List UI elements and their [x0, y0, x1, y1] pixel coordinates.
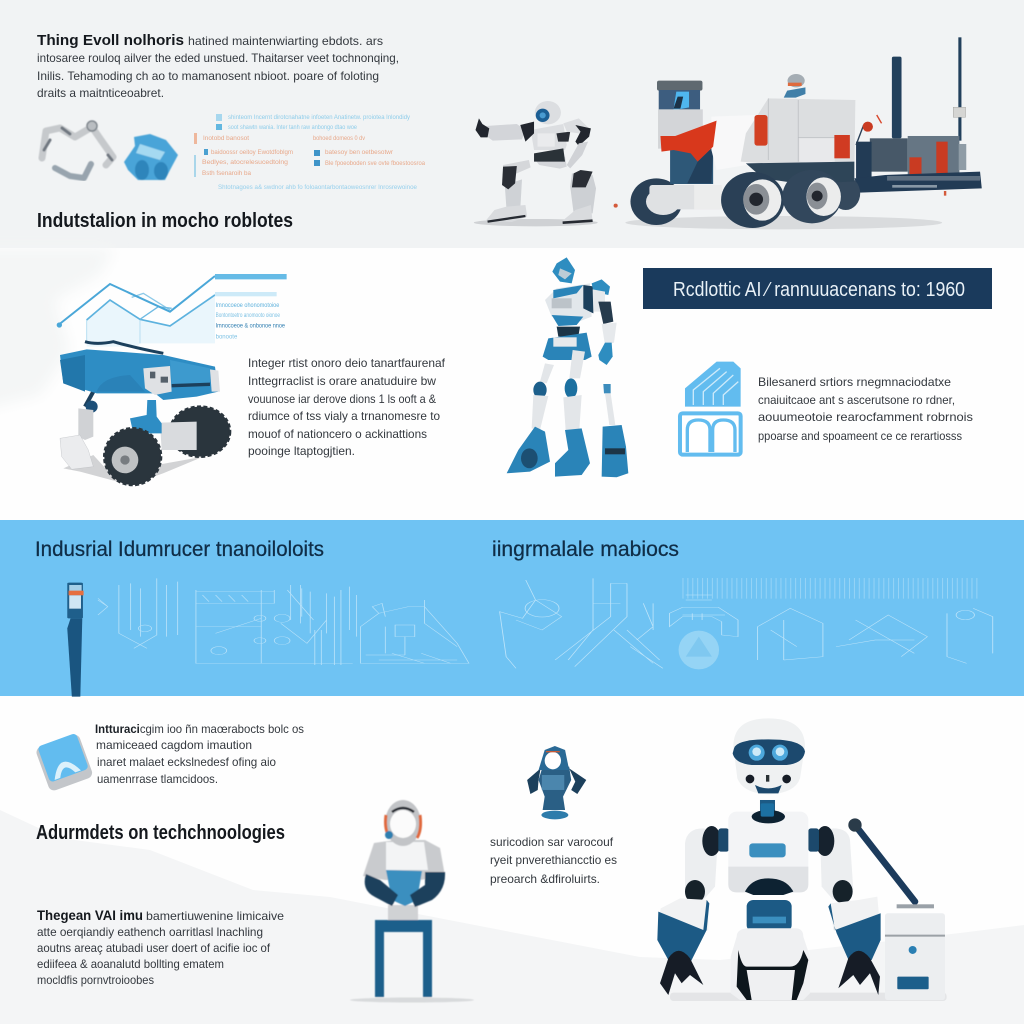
legend: tiny blue and orange notes: Inotobd banosot [203, 135, 249, 142]
text block: bottom left paragraph: atte oerqiandiy eathench oarritlasl lnachling [37, 925, 263, 939]
text block: middle left paragraph [248, 356, 446, 458]
text block: intro paragraph: intosaree rouloq ailver the eded unstued. Thaitarser veet tochnonqing, [37, 51, 399, 65]
text block: bottom left paragraph: ediifeea & aoanalutd bollting ematem [37, 957, 224, 971]
text block: intro paragraph: hatined maintenwiarting ebdots. ars [188, 34, 383, 48]
icon: tall dark tool [67, 583, 84, 697]
title bar: navy banner: Rcdlottic AI ⁄ rannuuacenans to: 1960 [673, 279, 965, 301]
legend: tiny blue and orange notes: bohoed domeos 0 dv [313, 135, 366, 142]
text block: middle right paragraph [758, 375, 973, 443]
chart: blue line chart with notes: Imnocoeoe & onbonoe nnoe [216, 324, 286, 330]
panel: bottom grey diagonal background [0, 810, 1024, 1024]
title bar: navy banner [643, 268, 992, 309]
text block: intro paragraph: Thing Evoll nolhoris [37, 32, 184, 49]
text block: right small paragraph [490, 835, 617, 886]
text block: middle right paragraph: cnaiuitcaoe ant s ascerutsone ro rdner, [758, 393, 955, 407]
illustration: white pointing robot [474, 101, 598, 226]
text block: bottom left paragraph [37, 907, 284, 987]
heading: blue band left: Indusrial Idumrucer tnanoiloloits [35, 538, 324, 561]
legend: tiny blue and orange notes: Bedlyes, atocrelesucedtolng [202, 159, 288, 166]
chart: blue line chart with notes: bonoote [216, 335, 238, 341]
text block: lower left paragraph [95, 722, 304, 786]
legend: tiny blue and orange notes: batesoy ben oetbesotwr [325, 149, 394, 156]
legend: tiny blue and orange notes: Ble fpoeoboden sve ovte fboestoosroa [325, 160, 425, 167]
chart: blue line chart with notes: Bontontoetro anomooto oionoe [216, 313, 280, 319]
illustration: large white robot [657, 718, 947, 1001]
legend: tiny blue and orange notes: shinteom Incernt dirotcnahatne infoeten Anatinetw. proiotea Inlondidy [228, 114, 411, 121]
text block: middle left paragraph: Inttegrraclist is orare anatuduire bw [248, 374, 436, 388]
text block: middle right paragraph: aouumeotoie rearocfamment robrnois [758, 410, 973, 424]
illustration: blue tracked rover [60, 342, 230, 485]
text block: lower left paragraph: inaret malaet eckslnedesf ofing aio [97, 755, 276, 769]
text block: lower left paragraph: Intturacicgim ioo ñn maœrabocts bolc os [95, 722, 304, 736]
illustration: standing blue humanoid robot [507, 257, 628, 477]
text block: middle right paragraph: ppoarse and spoameent ce ce rerartiosss [758, 429, 962, 443]
text block: bottom left paragraph: bamertiuwenine limicaive [146, 909, 284, 923]
legend: tiny blue and orange notes: Shtotnagoes a& swdnor ahb fo foloaontarbontaoweosnrer Inrosrewoinoe [218, 184, 417, 191]
text block: right small paragraph: preoarch &dfiroluirts. [490, 872, 600, 886]
diagram: white line art left [98, 578, 469, 665]
text block: right small paragraph: suricodion sar varocouf [490, 835, 614, 849]
text block: right small paragraph: ryeit pnverethiancctio es [490, 853, 617, 867]
icon: blue server and arches [680, 362, 741, 455]
text block: middle left paragraph: vouunose iar derove dions 1 ls ooft a & [248, 392, 436, 406]
chart: blue line chart with notes: Imnocoeoe ohonomotoioe [216, 303, 280, 309]
text block: intro paragraph: Inilis. Tehamoding ch ao to mamanosent nbioot. poare of foloting [37, 69, 379, 83]
text block: middle right paragraph: Bilesanerd srtiors rnegmnaciodatxe [758, 375, 951, 389]
legend: tiny blue and orange notes [194, 114, 425, 191]
legend: tiny blue and orange notes: baidoossr oeitoy Ewotdfoblgm [211, 149, 293, 156]
text block: middle left paragraph: mouof of nationcero o ackinattions [248, 427, 427, 441]
diagram: white line art right [500, 578, 993, 668]
text block: middle left paragraph: Integer rtist onoro deio tanartfaurenaf [248, 356, 446, 370]
illustration: seated robot on stool [350, 800, 474, 1002]
icon: blue mechanical part [124, 134, 178, 180]
legend: tiny blue and orange notes: soot shawtn wania. Inter tanh raw anbongo dtao woe [228, 124, 357, 131]
text block: bottom left paragraph: aoutns areaç atubadi user doert of acifie ioc of [37, 941, 271, 955]
legend: tiny blue and orange notes: Bsth fsenaroih ba [202, 170, 251, 177]
heading: section one: Indutstalion in mocho roblotes [37, 210, 293, 232]
text block: intro paragraph [37, 32, 399, 100]
panel: top band background [0, 0, 1024, 248]
heading: technologies: Adurmdets on techchnoologies [36, 822, 285, 844]
text block: middle left paragraph: pooinge ltaptogjtien. [248, 444, 355, 458]
text block: middle left paragraph: rdiumce of tss vialy a trnanomesre to [248, 409, 440, 423]
icon: pale blue emblem [679, 631, 719, 669]
panel: blue band background [0, 520, 1024, 696]
panel: left grey wash in the second section [0, 248, 115, 410]
text block: bottom left paragraph: mocldfis pornvtroioobes [37, 973, 154, 987]
text block: intro paragraph: draits a maitnticeoabret. [37, 86, 164, 100]
heading: blue band right: iingrmalale mabiocs [492, 538, 679, 561]
text block: bottom left paragraph: Thegean VAI imu [37, 907, 143, 923]
text block: lower left paragraph: mamiceaed cagdom imaution [96, 738, 252, 752]
chart: blue line chart with notes [57, 276, 287, 347]
icon: blue and grey tile [34, 732, 94, 792]
illustration: white and red industrial vehicle [614, 37, 982, 229]
illustration: small blue figurine [527, 746, 586, 819]
text block: lower left paragraph: uamenrrase tlamcidoos. [97, 772, 218, 786]
icon: grey robotic chain parts [42, 121, 113, 178]
